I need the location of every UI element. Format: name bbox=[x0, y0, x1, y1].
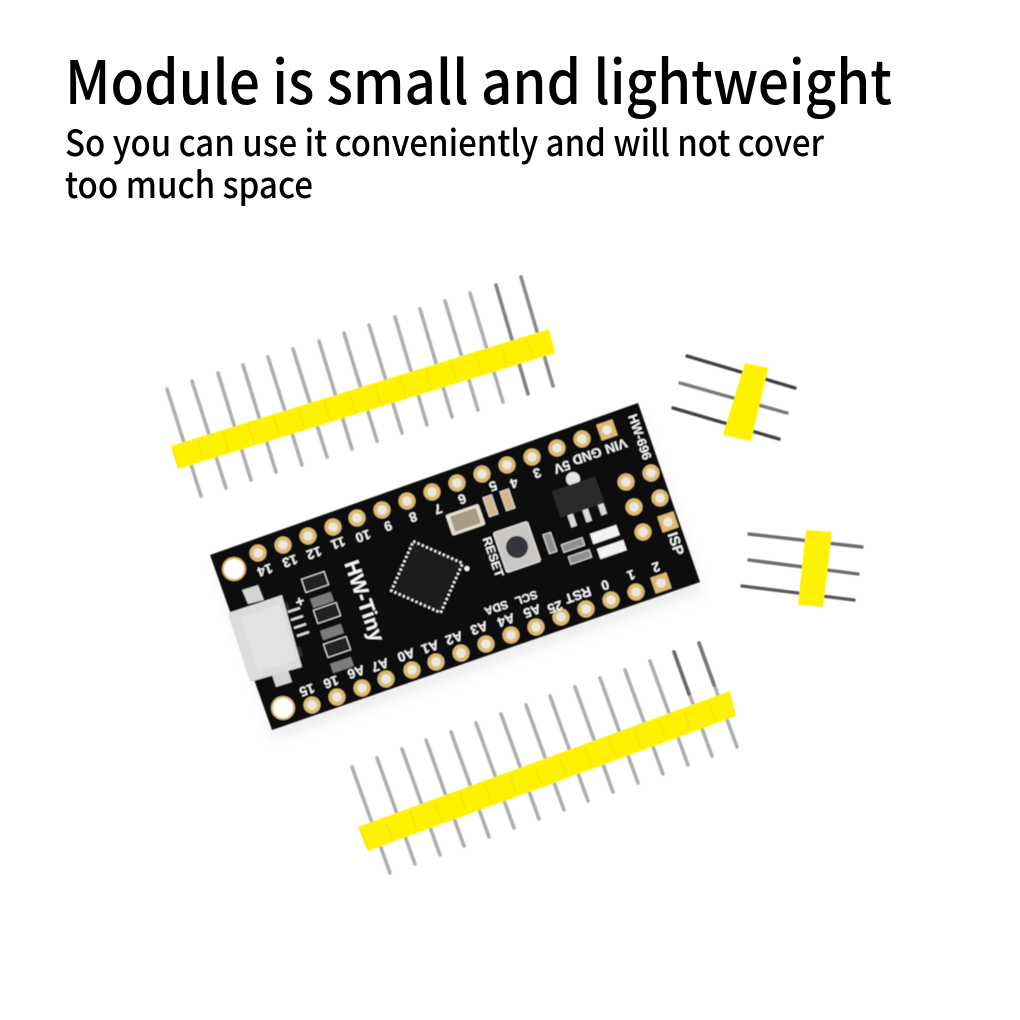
bottom row pin labels: RST bbox=[562, 584, 593, 607]
bottom row pin labels: 15 bbox=[297, 680, 317, 700]
bottom row pin labels: SDA bbox=[483, 597, 509, 617]
subtitle text block: too much space bbox=[65, 157, 313, 209]
bottom row pin labels: SCL bbox=[513, 588, 539, 606]
top row pin labels: 5V bbox=[552, 457, 572, 477]
top row pin labels: 4 bbox=[508, 475, 520, 491]
top row pin labels: 13 bbox=[280, 551, 300, 571]
top row pin labels bbox=[255, 435, 629, 580]
board code HW-696: HW-696 bbox=[625, 412, 655, 462]
bottom row pin labels: A3 bbox=[468, 618, 490, 638]
reset button bbox=[493, 521, 541, 573]
top row pin labels: 5 bbox=[487, 478, 499, 494]
subtitle text block bbox=[65, 115, 824, 209]
bottom row pin labels: A7 bbox=[369, 655, 391, 675]
bottom row pin labels: A2 bbox=[443, 628, 465, 648]
long pin header, bottom bbox=[352, 643, 737, 873]
top row pin labels: 8 bbox=[407, 509, 419, 525]
subtitle text block: So you can use it conveniently and will not cover bbox=[65, 115, 824, 167]
top row pin labels: 11 bbox=[328, 534, 347, 553]
top row pin labels: 6 bbox=[456, 491, 468, 507]
long pin header, top bbox=[167, 277, 555, 496]
bottom row pin labels: 0 bbox=[599, 577, 611, 593]
USB connector bbox=[228, 585, 309, 687]
circuit board bbox=[210, 403, 700, 730]
RESET label: RESET bbox=[480, 535, 507, 579]
bottom row pin labels bbox=[297, 559, 662, 700]
bottom row pin labels: 25 bbox=[545, 597, 565, 617]
top row pin labels: 10 bbox=[353, 526, 373, 546]
bottom row pads bbox=[304, 572, 672, 714]
bottom row pin labels: A1 bbox=[419, 637, 441, 657]
power components near USB bbox=[301, 571, 354, 673]
voltage regulator bbox=[552, 472, 607, 528]
bottom row pin labels: A4 bbox=[495, 610, 517, 630]
short 3-pin header, lower bbox=[742, 530, 862, 607]
microcontroller chip bbox=[391, 541, 470, 616]
ISP label: ISP bbox=[664, 530, 686, 558]
top row pin labels: VIN bbox=[603, 435, 629, 457]
top row pads bbox=[250, 419, 618, 562]
board shadow bbox=[215, 415, 703, 740]
plus mark: + bbox=[293, 592, 307, 611]
bottom row pin labels: A5 bbox=[521, 601, 543, 621]
top row pin labels: 14 bbox=[255, 560, 275, 580]
top row pin labels: 12 bbox=[304, 543, 324, 563]
top row pin labels: 9 bbox=[382, 518, 394, 534]
mounting holes bbox=[222, 557, 295, 720]
top row pin labels: 7 bbox=[432, 501, 444, 517]
top row pin labels: 3 bbox=[531, 465, 543, 481]
resistors and LEDs bbox=[543, 525, 627, 564]
bottom row pin labels: A6 bbox=[345, 662, 367, 682]
bottom row pin labels: A0 bbox=[395, 645, 417, 665]
bottom row pin labels: 2 bbox=[650, 559, 662, 575]
capacitors bbox=[483, 489, 515, 517]
crystal bbox=[445, 504, 486, 536]
top row pin labels: GND bbox=[570, 444, 604, 468]
board name HW-Tiny: HW-Tiny bbox=[339, 557, 389, 645]
ISP pads bbox=[618, 464, 679, 540]
bottom row pin labels: 1 bbox=[625, 567, 637, 583]
short 3-pin header, upper bbox=[673, 356, 795, 441]
title: Module is small and lightweight bbox=[65, 35, 892, 122]
bottom row pin labels: 16 bbox=[321, 672, 341, 692]
